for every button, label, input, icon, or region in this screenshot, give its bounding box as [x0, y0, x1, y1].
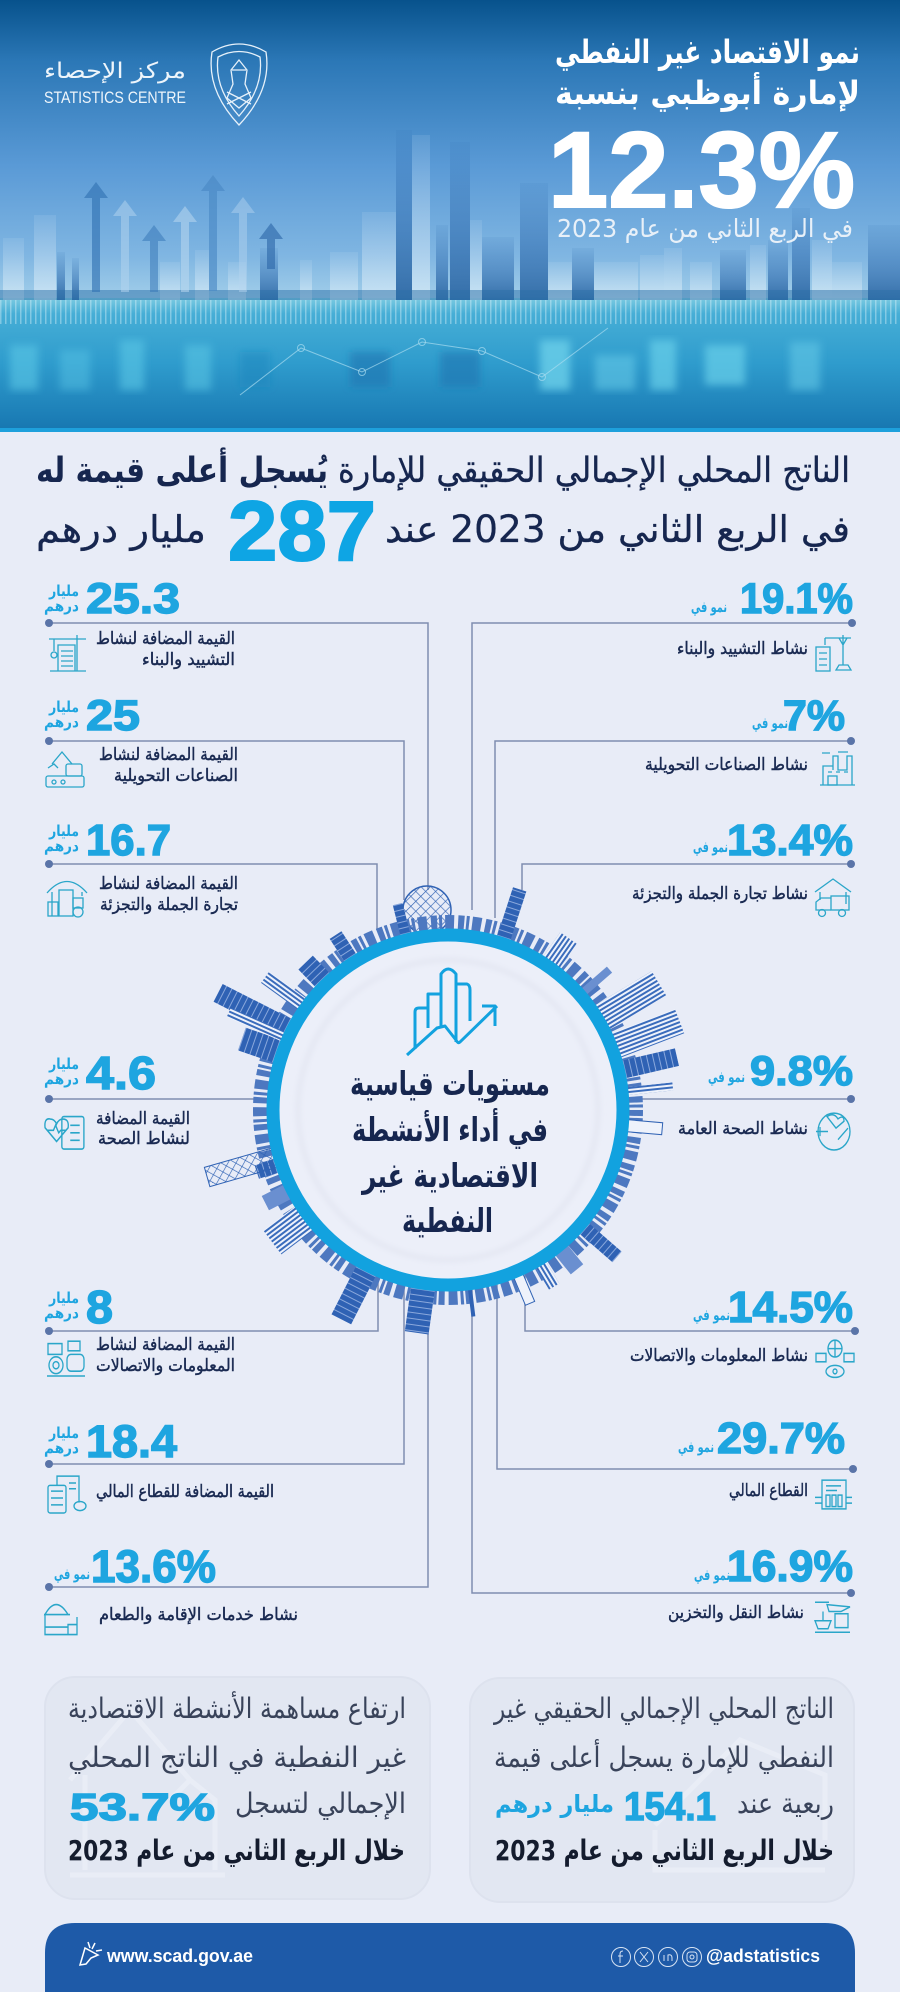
growth tag: نمو في	[694, 1566, 730, 1584]
card text	[68, 1690, 406, 1867]
label	[96, 1335, 235, 1376]
icon: rising bars	[407, 969, 497, 1055]
social icons	[612, 1948, 702, 1966]
value 9.8%: 9.8%	[750, 1047, 853, 1094]
left item: construction	[44, 575, 235, 671]
hero big percentage: 12.3%	[548, 109, 855, 230]
icon: devices	[47, 1341, 85, 1376]
card text: الإجمالي لتسجل	[235, 1787, 406, 1820]
website: www.scad.gov.ae	[106, 1946, 253, 1966]
right item: construction	[677, 575, 853, 671]
unit: مليار	[48, 582, 79, 600]
low rooftop band	[261, 923, 635, 1297]
unit	[44, 582, 79, 615]
card text: غير النفطية في الناتج المحلي	[68, 1741, 406, 1774]
value 14.5%: 14.5%	[728, 1283, 853, 1332]
unit: درهم	[44, 597, 79, 615]
hero heading line 2: لإمارة أبوظبي بنسبة	[555, 72, 860, 112]
unit	[44, 1289, 79, 1322]
label	[99, 874, 238, 915]
right item: manufacturing	[645, 692, 855, 785]
card text: مليار درهم	[495, 1790, 614, 1818]
icon: crane	[816, 635, 851, 671]
growth tag: نمو في	[693, 838, 728, 856]
icon: ship, plane and train	[815, 1602, 850, 1632]
hero rising arrows	[84, 175, 283, 292]
value 16.7: 16.7	[86, 816, 171, 865]
right item: wholesale and retail	[632, 816, 853, 916]
icon: finance report	[815, 1480, 852, 1509]
bottom right card	[470, 1678, 854, 1902]
icon: heart and clipboard	[45, 1116, 84, 1149]
icon: robot arm	[46, 752, 84, 787]
value 29.7%: 29.7%	[717, 1414, 845, 1463]
label: نشاط المعلومات والاتصالات	[630, 1346, 808, 1366]
central skyline ring	[204, 886, 684, 1334]
unit	[44, 1424, 79, 1457]
unit	[44, 1055, 79, 1088]
hero heading	[548, 33, 860, 244]
card text: خلال الربع الثاني من عام 2023	[68, 1834, 405, 1867]
headline 287: 287	[228, 484, 376, 578]
ring title	[350, 1064, 550, 1240]
card text: الناتج المحلي الإجمالي الحقيقي غير	[492, 1692, 834, 1725]
unit: درهم	[44, 713, 79, 731]
value 13.4%: 13.4%	[727, 816, 853, 865]
right item: finance	[678, 1414, 852, 1509]
value 16.9%: 16.9%	[727, 1542, 853, 1591]
water reflections	[10, 340, 820, 390]
icon: crane and building	[49, 635, 86, 671]
growth tag: نمو في	[678, 1438, 714, 1456]
unit	[44, 822, 79, 855]
label: القيمة المضافة للقطاع المالي	[96, 1482, 274, 1502]
unit: درهم	[44, 837, 79, 855]
label: القيمة المضافة	[96, 1109, 190, 1129]
statistics centre logo	[44, 44, 267, 125]
label: القيمة المضافة لنشاط	[96, 629, 235, 649]
label	[96, 629, 235, 670]
hero skyline	[0, 130, 900, 324]
label: نشاط تجارة الجملة والتجزئة	[632, 884, 808, 904]
ring title: مستويات قياسية	[350, 1064, 550, 1104]
value 19.1%: 19.1%	[740, 575, 853, 623]
left item: finance	[44, 1416, 274, 1513]
label: القيمة المضافة لنشاط	[96, 1335, 235, 1355]
left item: manufacturing	[44, 692, 238, 787]
card text: النفطي للإمارة يسجل أعلى قيمة	[494, 1738, 834, 1774]
growth tag: نمو في	[693, 1306, 730, 1324]
left item: wholesale and retail	[44, 816, 238, 917]
label: نشاط النقل والتخزين	[668, 1603, 804, 1623]
radial towers	[204, 887, 684, 1334]
left item: health	[44, 1047, 190, 1149]
hero period: في الربع الثاني من عام 2023	[557, 214, 853, 244]
unit	[44, 698, 79, 731]
card text: ارتفاع مساهمة الأنشطة الاقتصادية	[68, 1690, 406, 1725]
hero banner	[0, 0, 900, 432]
growth tag: نمو في	[691, 598, 727, 616]
label: نشاط الصناعات التحويلية	[645, 755, 808, 775]
label: الصناعات التحويلية	[114, 766, 238, 786]
label: نشاط التشييد والبناء	[677, 639, 808, 659]
icon: bed and cloche	[44, 1604, 77, 1634]
inner soft ring	[298, 960, 598, 1260]
headline line 1 regular: الناتج المحلي الإجمالي الحقيقي للإمارة	[338, 451, 850, 491]
icon: factory	[820, 752, 855, 785]
label: المعلومات والاتصالات	[96, 1356, 235, 1376]
main headline	[36, 447, 850, 578]
value 13.6%: 13.6%	[91, 1541, 216, 1592]
value 25.3: 25.3	[86, 575, 180, 623]
unit: مليار	[48, 1424, 79, 1442]
ring title: النفطية	[402, 1201, 493, 1240]
label: نشاط الصحة العامة	[678, 1119, 808, 1139]
label: تجارة الجملة والتجزئة	[100, 895, 238, 915]
value 4.6: 4.6	[86, 1047, 156, 1099]
unit: مليار	[48, 1289, 79, 1307]
headline line 2: في الربع الثاني من 2023 عند	[385, 508, 850, 551]
icon: cursor	[80, 1942, 102, 1965]
value 7%: 7%	[783, 692, 845, 740]
social handle: @adstatistics	[706, 1946, 820, 1966]
label: القيمة المضافة لنشاط	[99, 874, 238, 894]
icon: house and truck	[815, 879, 851, 916]
label: القطاع المالي	[729, 1481, 808, 1501]
footer bar	[45, 1923, 855, 1992]
label	[99, 745, 238, 786]
growth tag: نمو في	[708, 1068, 745, 1086]
label: التشييد والبناء	[142, 650, 235, 670]
right item: health	[678, 1047, 853, 1150]
left item: accommodation and food	[44, 1541, 298, 1634]
card watermark: houses	[70, 1710, 225, 1875]
right item: transport and storage	[668, 1542, 853, 1632]
growth tag: نمو في	[54, 1565, 90, 1583]
icon: public health	[816, 1113, 850, 1150]
headline unit: مليار درهم	[36, 508, 206, 551]
value 8: 8	[86, 1281, 113, 1333]
ring title: الاقتصادية غير	[360, 1156, 538, 1196]
logo emblem	[211, 44, 267, 125]
unit: درهم	[44, 1304, 79, 1322]
unit: مليار	[48, 698, 79, 716]
bottom left card	[45, 1677, 430, 1899]
connector lines	[45, 619, 859, 1597]
card watermark: houses	[655, 1740, 825, 1870]
growth tag: نمو في	[752, 714, 788, 732]
value 18.4: 18.4	[86, 1416, 177, 1467]
unit: مليار	[48, 822, 79, 840]
card text	[492, 1692, 834, 1867]
logo english name: STATISTICS CENTRE	[44, 88, 186, 107]
card text: 154.1	[624, 1785, 716, 1829]
ring title: في أداء الأنشطة	[352, 1108, 548, 1149]
blue ring	[273, 935, 623, 1285]
icon: calculator and document	[48, 1476, 86, 1513]
label: نشاط خدمات الإقامة والطعام	[99, 1605, 298, 1625]
right item: information and communications	[630, 1283, 854, 1377]
dome	[403, 886, 451, 934]
left item: information and communications	[44, 1281, 235, 1376]
icon: globe network	[816, 1340, 854, 1377]
label: لنشاط الصحة	[98, 1129, 190, 1149]
label	[96, 1109, 190, 1149]
water line graph	[240, 328, 608, 395]
card text: ربعية عند	[737, 1787, 834, 1820]
unit: درهم	[44, 1070, 79, 1088]
unit: مليار	[48, 1055, 79, 1073]
card text: خلال الربع الثاني من عام 2023	[495, 1834, 834, 1867]
label: القيمة المضافة لنشاط	[99, 745, 238, 765]
icon: warehouse	[47, 882, 87, 917]
logo arabic name: مركز الإحصاء	[44, 59, 186, 84]
headline line 1 bold: يُسجل أعلى قيمة له	[36, 447, 328, 491]
card text: 53.7%	[70, 1787, 215, 1829]
unit: درهم	[44, 1439, 79, 1457]
value 25: 25	[86, 692, 140, 740]
